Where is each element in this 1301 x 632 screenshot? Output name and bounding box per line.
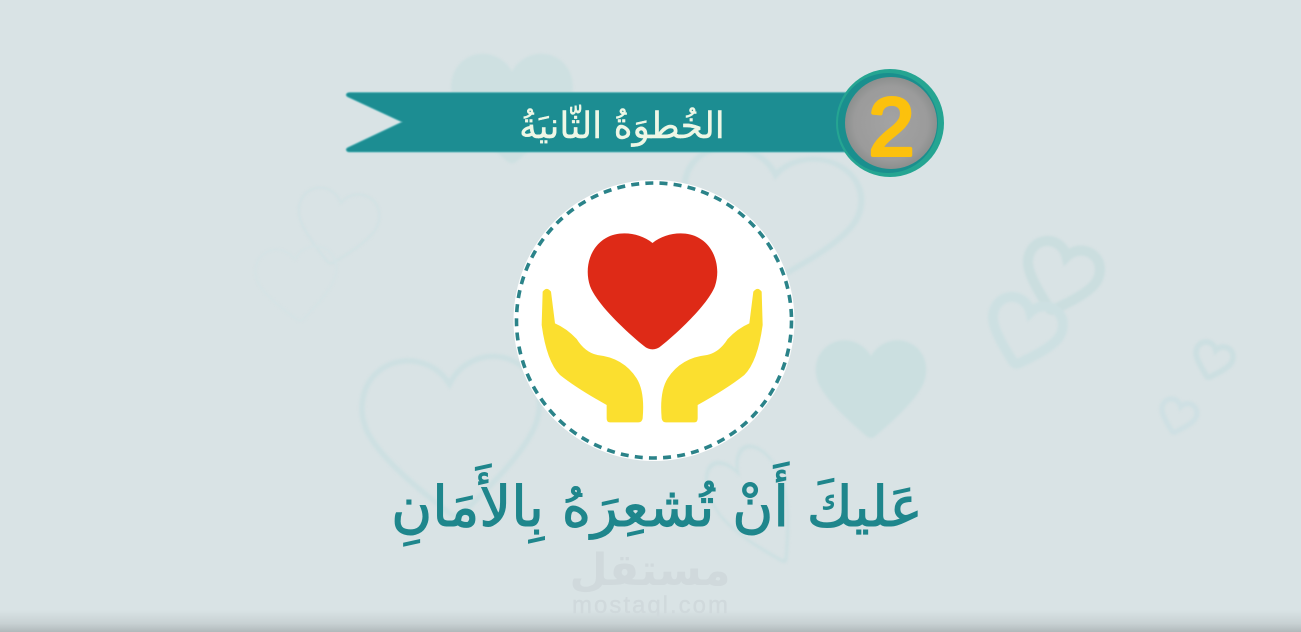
watermark arabic: مستقل — [570, 545, 730, 596]
main message text: عَليكَ أَنْ تُشعِرَهُ بِالأَمَانِ — [391, 461, 923, 546]
heart: linked lower right — [982, 292, 1067, 373]
heading text: الخُطوَةُ الثّانيَةُ — [519, 104, 725, 147]
number badge — [836, 69, 944, 177]
banner: step heading — [346, 92, 860, 152]
heart: outline below circle — [697, 439, 817, 578]
heart: large outline behind circle — [672, 141, 866, 297]
heart: faint outline left — [254, 244, 341, 324]
dashed ring — [516, 183, 792, 458]
badge ring — [836, 69, 944, 177]
heart: filled right — [816, 340, 926, 438]
badge grey centre — [845, 77, 937, 169]
badge dark edge — [838, 73, 938, 173]
heart: small right upper — [1190, 340, 1235, 382]
background hearts — [254, 54, 1235, 578]
watermark latin: mostaql.com — [572, 592, 728, 619]
icon: red heart — [588, 233, 717, 349]
heart: outline upper left — [290, 184, 383, 270]
number: 2 — [869, 82, 914, 173]
heart: small right lower — [1156, 397, 1199, 437]
heart: linked upper right — [1016, 236, 1105, 320]
heart: large outline bottom left — [360, 354, 545, 520]
icon: right hand — [661, 289, 763, 422]
watermark — [570, 545, 730, 619]
central circle with icon — [514, 180, 794, 461]
white disc — [514, 180, 794, 461]
icon: left hand — [542, 289, 643, 422]
heart: filled top — [451, 54, 573, 163]
bottom edge shadow — [0, 610, 1301, 632]
ribbon — [346, 92, 860, 152]
